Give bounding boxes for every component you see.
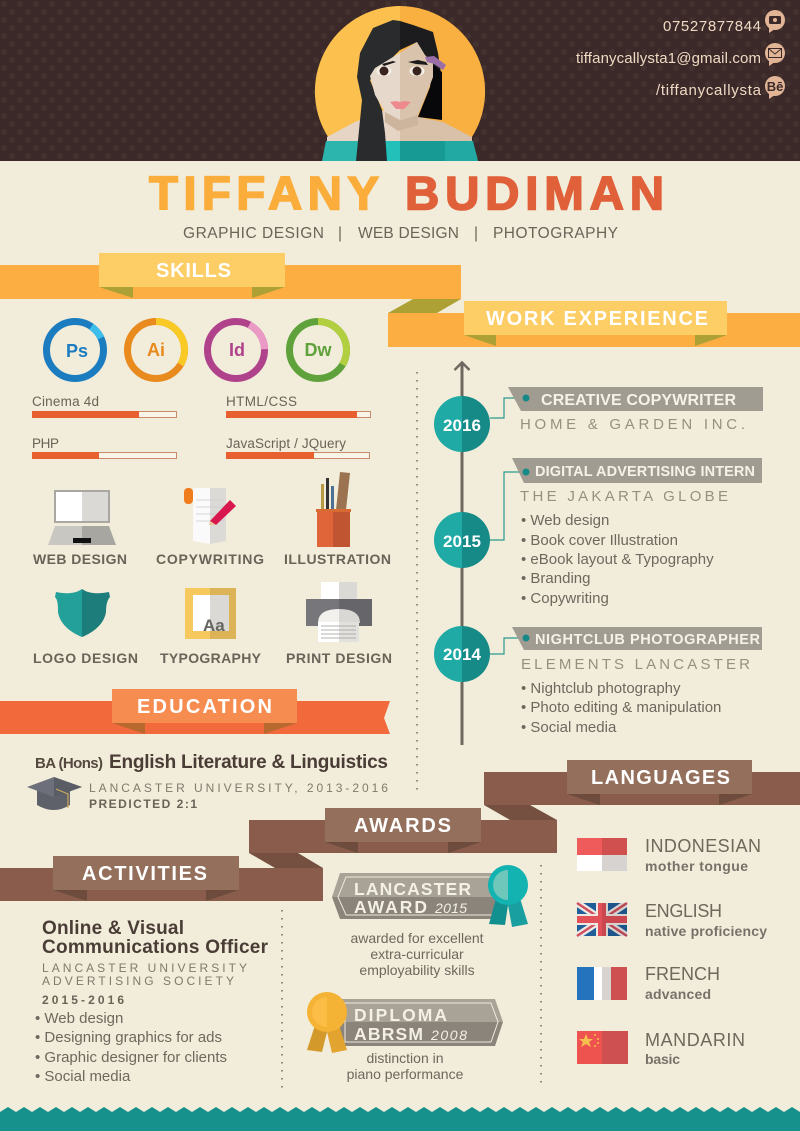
- year 2016: 2016: [443, 416, 481, 435]
- skill icon labels: WEB DESIGN: [33, 551, 127, 567]
- activities text: • Social media: [35, 1068, 131, 1085]
- ribbon: skills: SKILLS: [156, 260, 231, 282]
- job: digital advertising intern: • Copywriting: [521, 590, 609, 607]
- year 2014: 2014: [443, 645, 482, 664]
- skill bars: Cinema 4d: [32, 394, 99, 409]
- language names: mother tongue: [645, 858, 748, 874]
- activities text: ADVERTISING SOCIETY: [42, 974, 234, 988]
- skill icon labels: LOGO DESIGN: [33, 650, 138, 666]
- job: nightclub photographer: • Photo editing & manipulation: [521, 699, 721, 716]
- skill bars: PHP: [32, 436, 59, 451]
- portrait illustration: [315, 6, 485, 161]
- job: nightclub photographer: NIGHTCLUB PHOTOGRAPHER: [535, 632, 761, 648]
- award description: employability skills: [359, 962, 475, 978]
- timeline: [434, 362, 526, 745]
- job: digital advertising intern: DIGITAL ADVERTISING INTERN: [535, 464, 755, 480]
- skill icon labels: ILLUSTRATION: [284, 551, 391, 567]
- job: digital advertising intern: • Branding: [521, 570, 590, 587]
- year 2015: [434, 512, 490, 568]
- ribbon: education: EDUCATION: [137, 696, 272, 718]
- subtitle: [183, 225, 618, 242]
- activities text: 2015-2016: [42, 993, 124, 1007]
- photoshop ring: Ps: [66, 341, 88, 361]
- icon: laptop: [48, 490, 116, 545]
- award: diploma: ABRSM: [354, 1024, 423, 1044]
- language names: FRENCH: [645, 964, 720, 984]
- icon: typography: Aa: [203, 616, 225, 635]
- title: BUDIMAN: [405, 168, 664, 220]
- job: digital advertising intern: • Web design: [521, 512, 609, 529]
- education text: [35, 752, 388, 811]
- ribbon: activities: ACTIVITIES: [82, 863, 207, 885]
- year 2014: [434, 626, 490, 682]
- header band: [0, 0, 800, 161]
- subtitle: |: [474, 225, 478, 242]
- icon: printer: [306, 582, 372, 642]
- language names: MANDARIN: [645, 1030, 745, 1050]
- icon: mail: [765, 43, 785, 66]
- award description: [350, 930, 484, 978]
- diploma description: piano performance: [347, 1066, 464, 1082]
- job: digital advertising intern: THE JAKARTA GLOBE: [520, 488, 728, 505]
- footer zigzag band: [0, 1107, 800, 1131]
- icon: behance: Bē: [767, 79, 783, 94]
- ribbon: work experience: [388, 301, 800, 347]
- job: digital advertising intern: [512, 458, 762, 607]
- dreamweaver ring: Dw: [304, 340, 332, 360]
- indesign ring: Id: [229, 340, 245, 360]
- ribbon: awards: [249, 808, 557, 868]
- icon: phone: [765, 10, 785, 33]
- ribbon: languages: LANGUAGES: [591, 767, 730, 789]
- illustrator ring: Ai: [147, 340, 165, 360]
- ribbon: activities: [0, 856, 323, 901]
- photoshop ring: [35, 310, 115, 390]
- award description: extra-curricular: [370, 946, 464, 962]
- activities text: [35, 918, 269, 1085]
- flag: united kingdom: [577, 903, 627, 936]
- dreamweaver ring: [290, 322, 346, 378]
- award: lancaster: AWARD: [354, 897, 427, 917]
- job: nightclub photographer: • Social media: [521, 719, 617, 736]
- activities text: • Graphic designer for clients: [35, 1049, 227, 1066]
- diploma description: distinction in: [366, 1050, 444, 1066]
- flag: france: [577, 967, 627, 1000]
- contact details: [576, 10, 785, 99]
- skill icon labels: TYPOGRAPHY: [160, 650, 262, 666]
- job: nightclub photographer: • Nightclub photography: [521, 680, 681, 697]
- ribbon: awards: AWARDS: [354, 815, 451, 837]
- icon: typography: [185, 588, 236, 639]
- title: [149, 168, 664, 220]
- activities text: • Web design: [35, 1010, 123, 1027]
- job: creative copywriter: HOME & GARDEN INC.: [520, 416, 745, 433]
- activities text: Online & Visual: [42, 918, 184, 939]
- language names: INDONESIAN: [645, 836, 761, 856]
- skill icon labels: COPYWRITING: [156, 551, 264, 567]
- icon: orange rosette: [307, 992, 347, 1053]
- subtitle: |: [338, 225, 342, 242]
- job: nightclub photographer: [512, 627, 762, 736]
- icon: teal rosette: [488, 865, 528, 927]
- skill bars: HTML/CSS: [226, 394, 297, 409]
- connectors: [490, 398, 526, 654]
- flag: indonesia: [577, 838, 627, 871]
- illustrator ring: [128, 322, 184, 378]
- job: creative copywriter: [508, 387, 763, 433]
- contact details: 07527877844: [663, 18, 761, 35]
- education text: BA (Hons): [35, 755, 103, 772]
- language names: native proficiency: [645, 923, 767, 939]
- contact details: /tiffanycallysta: [656, 82, 762, 99]
- contact details: tiffanycallysta1@gmail.com: [576, 50, 761, 67]
- diploma description: [347, 1050, 464, 1082]
- year 2015: 2015: [443, 532, 481, 551]
- job: digital advertising intern: • eBook layout & Typography: [521, 551, 714, 568]
- language names: [645, 836, 767, 1067]
- award: diploma: [307, 992, 503, 1053]
- education text: PREDICTED 2:1: [89, 797, 197, 811]
- title: TIFFANY: [149, 168, 379, 220]
- job: nightclub photographer: ELEMENTS LANCASTER: [521, 656, 750, 673]
- award description: awarded for excellent: [350, 930, 484, 946]
- award: lancaster: 2015: [434, 900, 467, 916]
- icon: illustration: [316, 472, 351, 547]
- year 2016: [434, 396, 490, 452]
- skill icon labels: [33, 551, 392, 666]
- icon: behance: [765, 76, 785, 99]
- education text: LANCASTER UNIVERSITY, 2013-2016: [89, 781, 388, 795]
- award: diploma: 2008: [430, 1027, 467, 1043]
- ribbon: skills: [0, 253, 461, 313]
- job: creative copywriter: CREATIVE COPYWRITER: [541, 392, 736, 409]
- activities text: LANCASTER UNIVERSITY: [42, 961, 247, 975]
- subtitle: GRAPHIC DESIGN: [183, 225, 324, 242]
- ribbon: work experience: WORK EXPERIENCE: [486, 308, 708, 330]
- icon: graduation cap: [27, 777, 82, 810]
- ribbon: education: [0, 689, 390, 734]
- job: digital advertising intern: • Book cover Illustration: [521, 532, 678, 549]
- ribbon: languages: [484, 760, 800, 820]
- education text: English Literature & Linguistics: [109, 752, 388, 773]
- skill bars: [32, 394, 370, 459]
- subtitle: WEB DESIGN: [358, 225, 459, 242]
- skill bars: JavaScript / JQuery: [226, 436, 346, 451]
- activities text: Communications Officer: [42, 937, 269, 958]
- icon: copywriting: [184, 488, 236, 544]
- flag: china: [577, 1031, 628, 1064]
- skill rings: [35, 310, 346, 390]
- skill icon labels: PRINT DESIGN: [286, 650, 392, 666]
- language names: basic: [645, 1051, 680, 1067]
- subtitle: PHOTOGRAPHY: [493, 225, 618, 242]
- language names: advanced: [645, 986, 711, 1002]
- language names: ENGLISH: [645, 901, 722, 921]
- award: diploma: DIPLOMA: [354, 1005, 447, 1025]
- icon: shield: [55, 589, 110, 637]
- activities text: • Designing graphics for ads: [35, 1029, 222, 1046]
- award: lancaster: LANCASTER: [354, 879, 471, 899]
- indesign ring: [197, 311, 275, 389]
- award: lancaster: [332, 865, 528, 927]
